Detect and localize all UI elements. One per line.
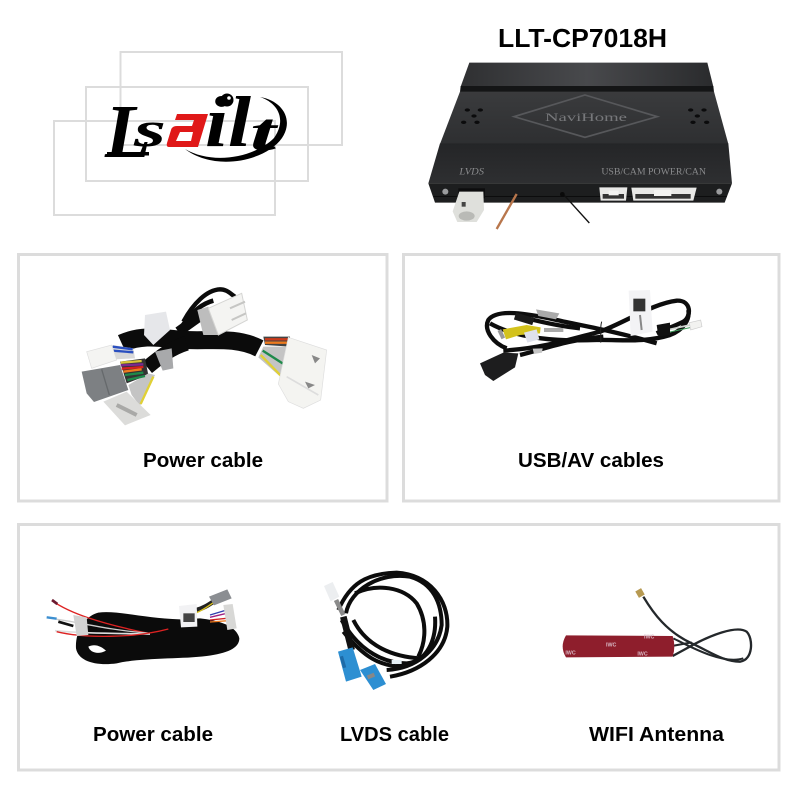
product photo: NaviHome box: NaviHome [545, 110, 627, 124]
photo: power cable harness [82, 289, 327, 425]
label: USB/AV cables: USB/AV cables [518, 450, 664, 472]
logo: Lsailt wordmark: il [205, 82, 251, 162]
photo: WIFI antenna: IWC [644, 635, 655, 641]
logo frame rectangles [54, 52, 342, 215]
logo block [54, 52, 342, 215]
panel frame [18, 254, 387, 501]
photo: WIFI antenna: IWC [637, 652, 648, 658]
logo: Lsailt wordmark: t [250, 102, 279, 162]
photo: WIFI antenna [563, 588, 751, 662]
photo: LVDS cable coil [324, 573, 447, 690]
logo: Lsailt wordmark: L [104, 90, 151, 174]
panel: USB/AV cables [404, 254, 779, 501]
photo: WIFI antenna: IWC [565, 651, 576, 657]
photo: power cable bundle [47, 589, 239, 664]
label: power cable: Power cable [93, 724, 213, 746]
product photo: NaviHome box [428, 63, 732, 229]
product photo: NaviHome box: LVDS [458, 167, 485, 177]
photo: USB and AV cables [480, 290, 702, 381]
logo: Lsailt wordmark: s [132, 101, 166, 157]
logo: Lsailt wordmark [104, 82, 287, 174]
title: LLT-CP7018H [498, 23, 667, 53]
label: power cable: Power cable [143, 450, 263, 472]
panel frame [18, 524, 779, 770]
label: WIFI antenna: WIFI Antenna [589, 724, 725, 746]
product photo: NaviHome box: USB/CAM POWER/CAN [601, 167, 707, 177]
panel: power cable harness [18, 254, 387, 501]
label: LVDS cable: LVDS cable [340, 724, 449, 746]
panel frame [404, 254, 779, 501]
panel: accessories [18, 524, 779, 770]
photo: WIFI antenna: IWC [606, 642, 617, 648]
